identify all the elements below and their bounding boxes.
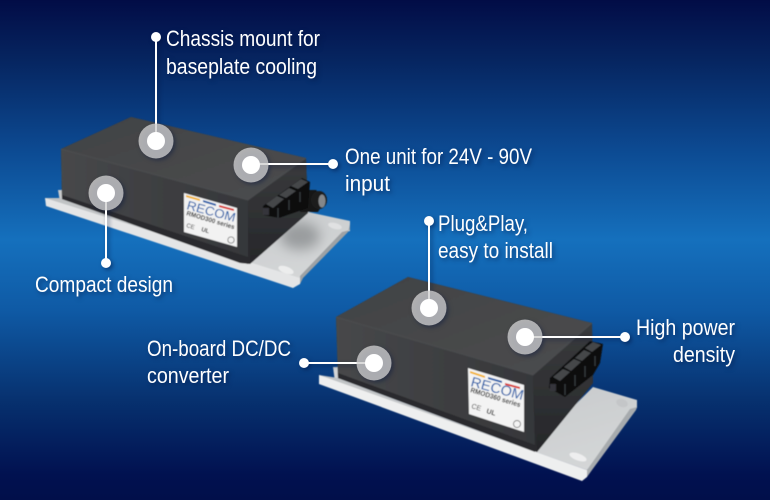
callout: 24V-90V input: One unit for 24V - 90V <box>345 144 532 169</box>
product label: RECOM <box>469 373 526 403</box>
product label: UL <box>200 227 210 235</box>
product: RMOD300 converter <box>45 117 350 288</box>
callout: on-board DC/DC converter <box>147 336 392 388</box>
product label: CE <box>470 403 482 413</box>
product label: RMOD300 series <box>185 210 236 231</box>
callout: high power density: High power <box>636 315 735 340</box>
product label: RECOM <box>185 198 237 225</box>
callout: plug and play <box>412 211 553 326</box>
mounting plate <box>45 190 350 288</box>
product label <box>184 193 237 247</box>
callout: chassis mount: Chassis mount for <box>166 26 320 51</box>
callout: 24V-90V input: input <box>345 171 390 196</box>
connector <box>549 341 603 397</box>
callout: compact design: Compact design <box>35 272 173 297</box>
callout: 24V-90V input <box>234 144 532 196</box>
callout: high power density: density <box>673 342 735 367</box>
callout: chassis mount: baseplate cooling <box>166 54 317 79</box>
product label: CE <box>185 223 195 231</box>
product: RMOD360 converter <box>319 277 637 481</box>
callout: plug and play: Plug&Play, <box>438 211 528 236</box>
callout: compact design <box>35 176 173 297</box>
callout: chassis mount <box>138 26 320 158</box>
product label: UL <box>485 408 497 418</box>
mounting plate <box>319 367 637 481</box>
product label <box>468 368 526 432</box>
product label: RMOD360 series <box>469 387 521 409</box>
enclosure <box>336 277 593 452</box>
callout: high power density <box>508 315 735 367</box>
connector <box>263 178 327 218</box>
callout: on-board DC/DC converter: converter <box>147 363 229 388</box>
callout: plug and play: easy to install <box>438 238 553 263</box>
enclosure <box>61 117 308 264</box>
callout: on-board DC/DC converter: On-board DC/DC <box>147 336 291 361</box>
